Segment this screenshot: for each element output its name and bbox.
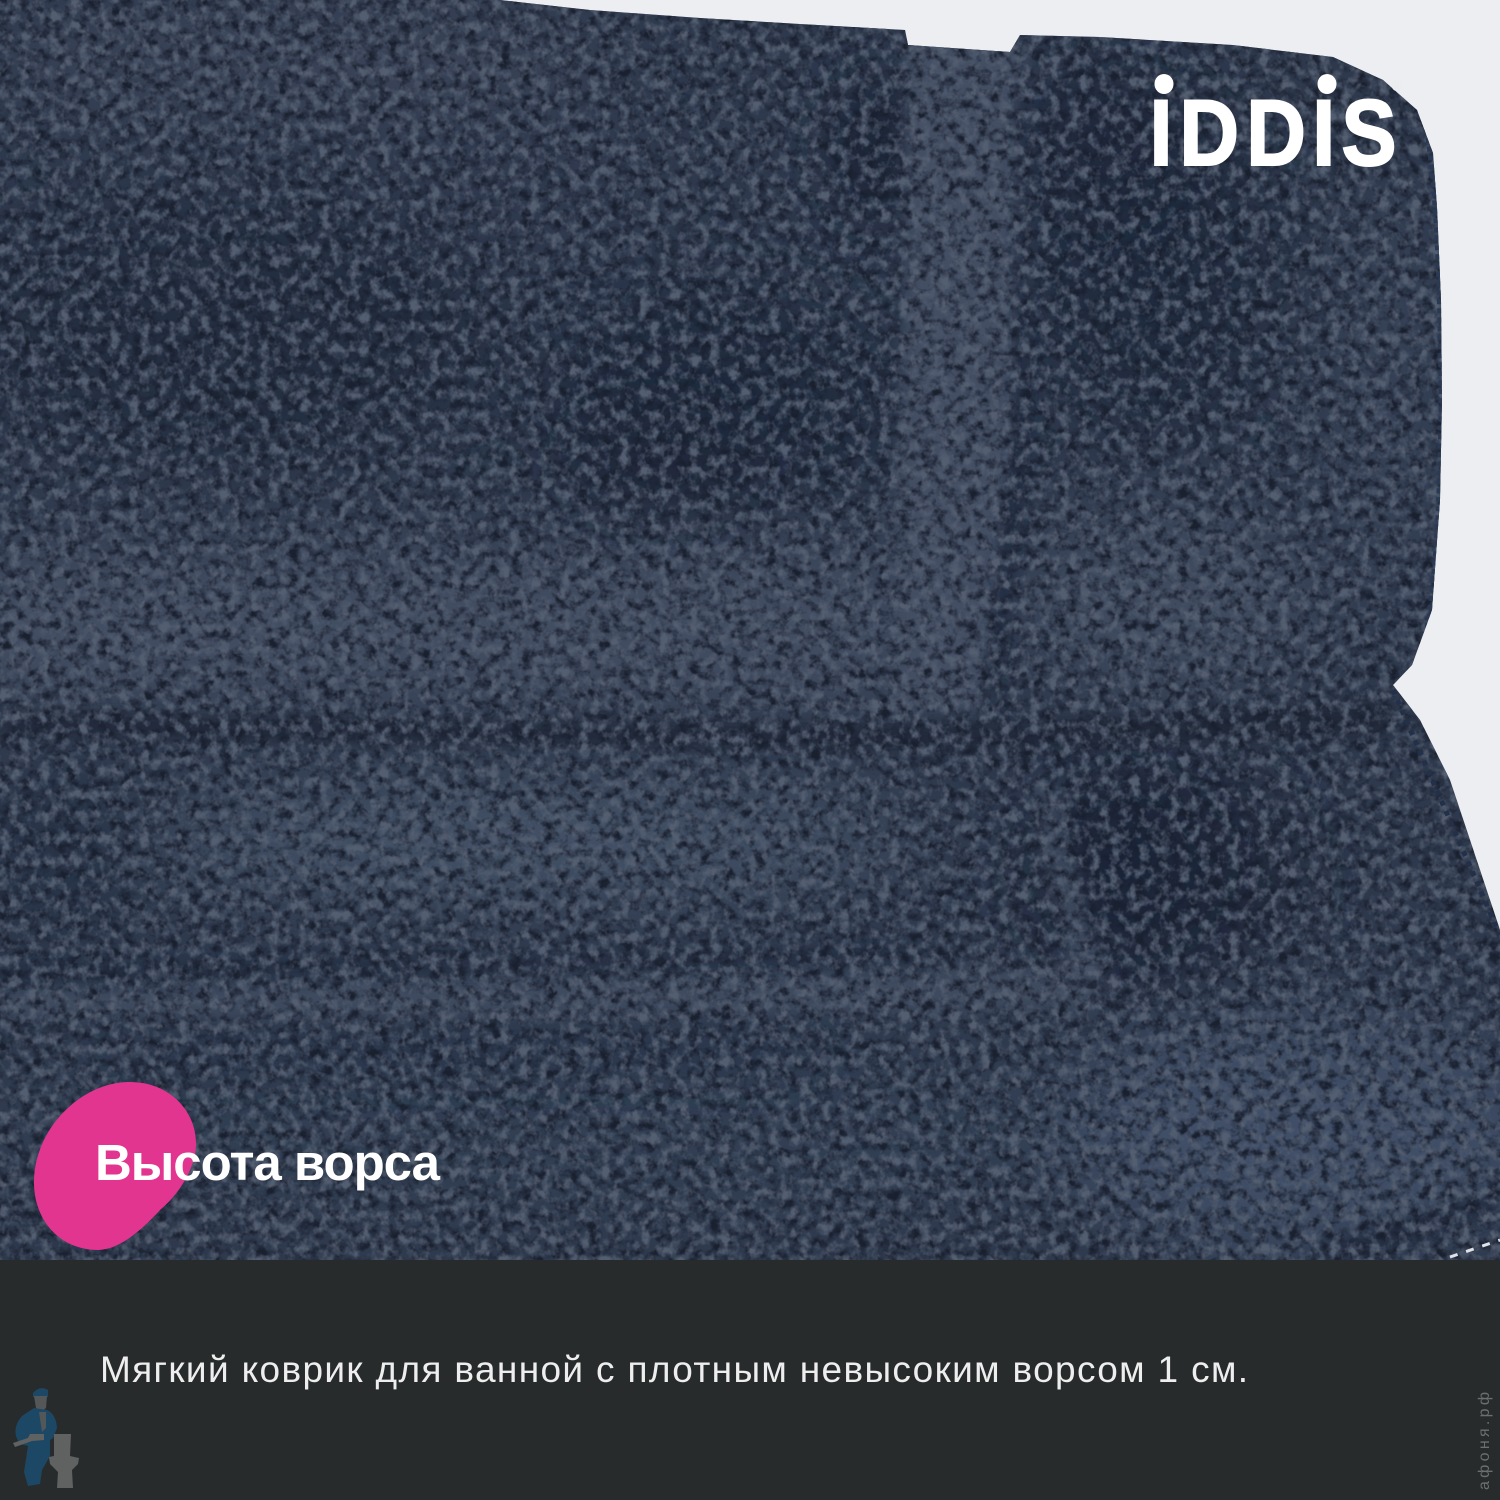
plumber cap and head <box>33 1388 48 1397</box>
toilet <box>49 1434 79 1488</box>
icon: plumber with toilet watermark <box>13 1388 79 1488</box>
loop-pile diagonal strip <box>1030 780 1105 985</box>
logo wordmark: IDDIS <box>1149 80 1396 185</box>
wrench <box>13 1434 44 1447</box>
heading: Высота ворса <box>95 1134 441 1191</box>
logo i dots <box>1154 74 1336 94</box>
callout: pink blob heading <box>34 1082 441 1250</box>
body text: Мягкий коврик для ванной с плотным невысоким ворсом 1 см. <box>100 1349 1248 1390</box>
loop-pile vertical strip <box>895 40 1030 710</box>
watermark: site name: афоня.рф <box>1476 1392 1493 1490</box>
registered mark: ® <box>1391 78 1403 95</box>
plumber shirt <box>39 1412 46 1432</box>
logo: iDDiS <box>1149 74 1403 185</box>
pink blob <box>34 1082 196 1250</box>
plumber body <box>15 1408 57 1486</box>
rug binding stitches <box>1425 120 1441 640</box>
panel: dark caption band <box>0 1260 1500 1500</box>
loop-pile horizontal strip <box>0 965 1100 1020</box>
fold shadows <box>0 90 1500 1262</box>
